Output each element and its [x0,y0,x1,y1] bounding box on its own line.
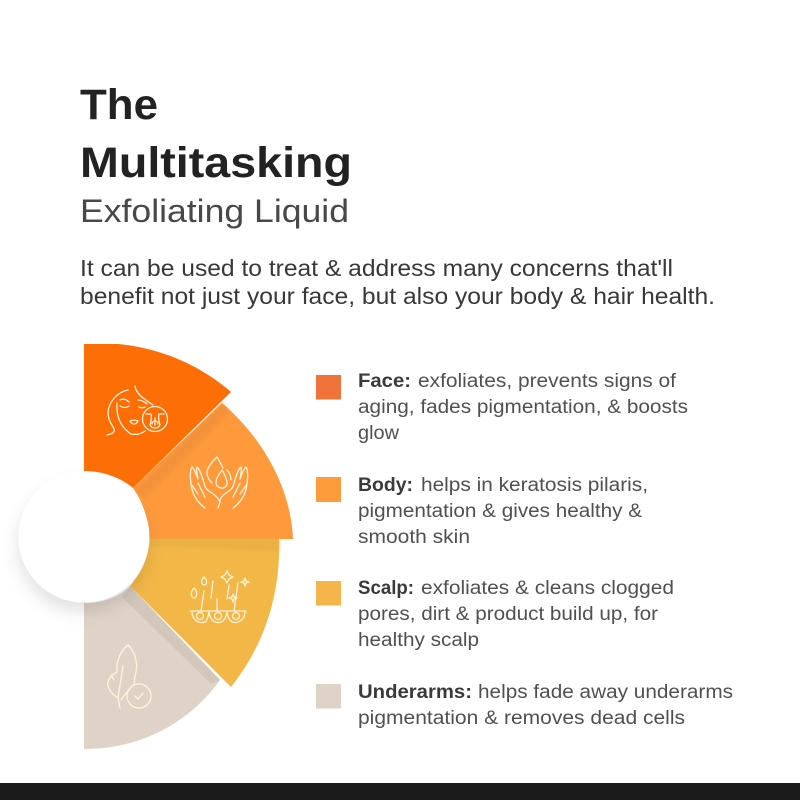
text: body: smooth skin [358,527,470,548]
title: Multitasking [80,139,352,187]
text: face: exfoliates, prevents signs of [418,371,677,392]
swatch: face [316,375,341,400]
legend: scalp [316,578,674,651]
swatch: body [316,477,341,502]
semicircular chart [18,344,293,749]
white centre circle [18,472,150,602]
text: body [358,475,648,548]
text: underarms: Underarms: [358,682,472,703]
segment: face [84,344,231,488]
legend: body [316,475,648,548]
icon: hands with droplets [190,457,248,508]
legend: underarms [316,682,733,729]
text: face: glow [358,423,399,444]
icon: hair follicles and sparkles [190,571,249,623]
segment: body [133,403,293,539]
title [80,81,352,187]
swatch: underarms [316,684,341,708]
text: face: Face: [358,371,411,392]
text: body: Body: [358,475,413,496]
title: The [80,81,158,129]
intro paragraph [80,255,715,309]
segment: underarms [84,586,220,749]
text: face [358,371,688,444]
text: underarms: pigmentation & removes dead cells [358,708,685,729]
icon: face with pore [107,386,168,435]
subtitle: Exfoliating Liquid [80,193,349,229]
text: underarms: helps fade away underarms [478,682,733,703]
intro paragraph: benefit not just your face, but also your body & hair health. [80,283,715,309]
text: underarms [358,682,733,729]
text: scalp [358,578,674,651]
text: body: pigmentation & gives healthy & [358,501,642,522]
intro paragraph: It can be used to treat & address many concerns that'll [80,255,673,281]
text: scalp: healthy scalp [358,630,479,651]
text: scalp: Scalp: [358,578,414,599]
legend: face [316,371,688,444]
icon: feather with check [108,645,151,708]
text: face: aging, fades pigmentation, & boosts [358,397,688,418]
bottom bar [0,783,800,800]
swatch: scalp [316,581,341,606]
text: scalp: exfoliates & cleans clogged [421,578,674,599]
text: body: helps in keratosis pilaris, [421,475,648,496]
segment: scalp [130,539,279,687]
text: scalp: pores, dirt & product build up, for [358,604,659,625]
